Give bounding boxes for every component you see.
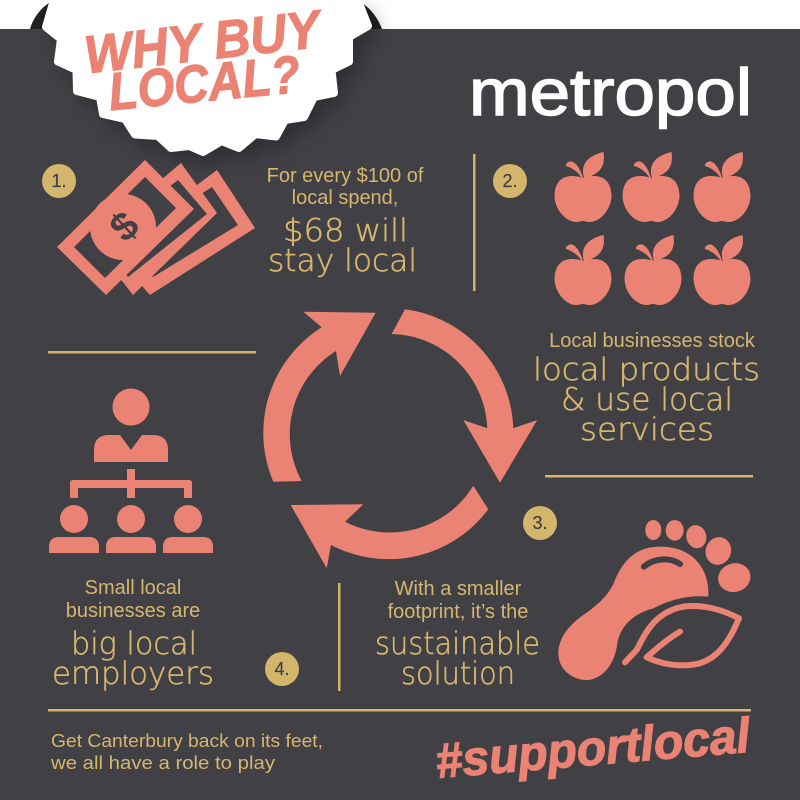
text block 3: solution [401,656,515,692]
icon: apples [554,152,750,305]
divider: left upper [48,351,256,354]
icon: org chart [49,388,213,553]
divider: bottom [48,709,751,712]
icon: money notes: $ [102,203,148,250]
text block 1: local spend, [292,187,398,209]
badge number 2: 2. [502,171,518,191]
badge number 4 [265,652,299,686]
text block 2 [533,330,760,448]
text block 3 [375,578,540,692]
closing text: we all have a role to play [50,752,276,773]
text block 2: & use local [561,382,733,418]
text block 1: stay local [268,243,417,279]
badge ears [30,3,382,29]
badge: why buy local [46,0,368,152]
badge number 2 [493,164,527,198]
closing text: Get Canterbury back on its feet, [51,730,323,751]
text block 2: services [580,412,714,448]
text block 4: employers [52,656,214,692]
text block 4: Small local [85,577,181,599]
icon: money notes [57,160,255,295]
closing text [50,730,323,773]
text block 4: businesses are [66,600,200,622]
text block 1: For every $100 of [267,165,424,187]
divider: step 1 and 2 [473,154,476,291]
cycle arrows [263,309,537,568]
text block 2: Local businesses stock [549,330,756,352]
text block 3: footprint, it’s the [388,601,528,623]
text block 4 [52,577,214,692]
badge number 1 [42,164,76,198]
text block 2: local products [533,352,760,388]
divider: step 3 and 4 [338,583,340,691]
text block 4: big local [71,626,197,662]
text block 3: sustainable [375,626,540,662]
hashtag: #supportlocal [433,709,753,789]
badge number 1: 1. [51,171,67,191]
divider: right [545,475,753,478]
text block 3: With a smaller [395,578,522,600]
logo: metropol: metropol [469,55,752,129]
title: WHY BUY [81,0,327,85]
icon: footprint with leaf [558,520,754,680]
badge shadow [50,10,380,166]
title: LOCAL? [106,45,303,122]
badge number 3 [523,506,557,540]
text block 1 [267,165,424,279]
title [81,0,327,122]
badge number 4: 4. [274,659,290,679]
badge number 3: 3. [532,513,548,533]
text block 1: $68 will [283,213,408,249]
